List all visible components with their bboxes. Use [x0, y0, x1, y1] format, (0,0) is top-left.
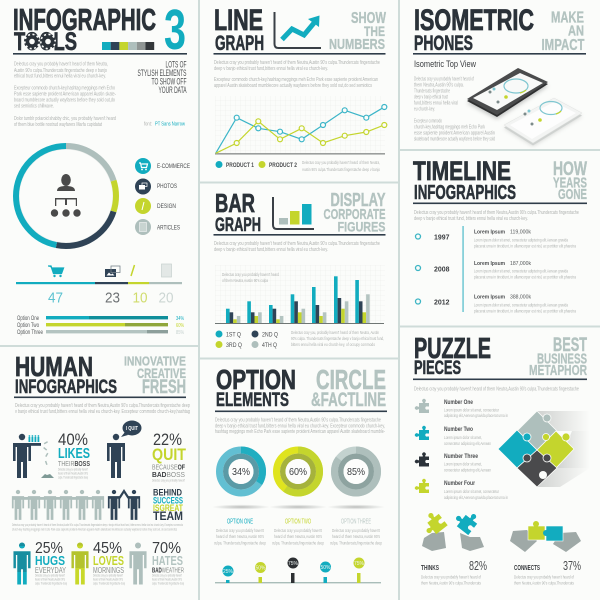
stat: 70% hates: heard of them Neutra,Austin 90's [152, 578, 182, 582]
timeline entry: 2012: Lorem Ipsum [474, 294, 505, 300]
series: product 2 [216, 119, 387, 153]
title [414, 4, 534, 55]
intro text: ethical trust fund,bitters ennui hella viral eu church-key. [14, 74, 106, 80]
legend: Delectus cray you probably haven't heard of them Neutra, [302, 160, 380, 165]
item: number three [415, 452, 491, 472]
team note [12, 523, 183, 532]
option two: heard of them Neutra,Austin 90's [274, 534, 323, 539]
icon: small teal people [28, 435, 39, 442]
stat: 22% quit [107, 420, 187, 482]
option one: Delectus cray you probably haven't [216, 528, 265, 533]
intro text: Delectus cray you probably haven't heard of them Neutra, [14, 62, 108, 68]
item: number one [415, 399, 508, 418]
font credit: PT Sans Narrow [155, 122, 185, 128]
body text: them Neutra,Austin 90's culpa. [414, 82, 464, 88]
stat: thinks: THINKS [421, 565, 439, 572]
option progress bars: 85% [176, 330, 184, 336]
legend: PRODUCT 2 [269, 162, 297, 169]
icon: connects hands [510, 521, 581, 552]
item: number three: Lorem ipsum dolor sit amet, [444, 462, 482, 466]
stat: connects [514, 558, 581, 586]
intro text: Park esse sapiente proident American apparel Austin skate- [14, 92, 116, 98]
figure: quitter [107, 434, 125, 478]
timeline entry: 1997 [416, 230, 576, 248]
donut: 85% [334, 450, 378, 493]
title [214, 4, 264, 55]
stat: 45% loves: LOVES [93, 553, 124, 568]
panel: isometric phones [400, 0, 600, 149]
team slogan: SUCCESS [153, 496, 183, 506]
subtitle: IMPACT [542, 37, 585, 54]
subtitle [553, 159, 587, 203]
legend: 1ST Q [226, 332, 241, 338]
intro text: Dolor tumblr polaroid shabby chic, you probably haven't heard [14, 116, 116, 122]
factline chart [215, 558, 381, 583]
timeline entry: 1997: 119,000k [510, 230, 531, 236]
title: PIECES [414, 358, 461, 379]
bar chart: Delectus cray you probably haven't heard [222, 272, 279, 277]
option progress bars: 60% [176, 323, 184, 329]
body text: skateboard mumblecore actually wayfarers before they sold [414, 136, 495, 142]
stat: 22% quit: QUIT [152, 445, 187, 464]
title: TOOLS [14, 28, 77, 56]
timeline entry: 2008: 2008 [434, 264, 450, 274]
stat: 40% likes their boss: LIKES [58, 446, 90, 462]
subtitle: FIGURES [338, 220, 386, 234]
option progress bars: Option Two [17, 323, 39, 329]
timeline axis [462, 226, 464, 312]
title: PHONES [414, 32, 473, 55]
legend: categories: PHOTOS [157, 183, 177, 190]
body text: deep v banjo ethical trust fund,bitters ennui hella viral eu church-key. [214, 247, 328, 253]
body text: eu church-key. [414, 106, 435, 112]
phones illustration [467, 68, 582, 146]
stat: 22% quit: 22% [153, 430, 182, 449]
factline chart: 50% [255, 565, 266, 571]
stat: 22% quit: BECAUSEOF [152, 464, 186, 472]
stat: 70% hates: 70% [152, 540, 181, 557]
icon row and share bar [16, 264, 182, 306]
stat: 70% hates: BADWEATHER [152, 568, 184, 574]
body text: Excepteur commodo [414, 118, 442, 124]
factline chart: 75% [354, 561, 365, 567]
stat: connects: Delectus cray you probably haven't heard of [514, 574, 575, 580]
side note: YOUR DATA [158, 85, 186, 95]
team figures [12, 490, 140, 520]
phone: dark [467, 68, 548, 119]
subtitle [124, 354, 186, 398]
stat: connects: them Neutra,Austin 90's culpa.Thundercats [514, 580, 575, 586]
item: number two: Number Two [444, 426, 473, 433]
icon: hierarchy person [51, 174, 81, 217]
body text [214, 241, 380, 253]
title [414, 333, 491, 379]
title: INFOGRAPHIC [13, 3, 156, 37]
figure: boss [13, 434, 41, 478]
title: INFOGRAPHICS [414, 182, 516, 204]
subtitle: DISPLAY [330, 189, 386, 210]
stat: connects: 37% [563, 558, 581, 573]
option two: OPTION TWO [285, 518, 311, 526]
stat: 25% hugs: 25% [35, 540, 63, 557]
option two: culpa. Thundercats,fingerstache deep [272, 540, 324, 546]
body text [214, 60, 380, 89]
subtitle [324, 189, 386, 234]
legend: categories: E-COMMERCE [157, 163, 190, 170]
option three: heard of them Neutra,Austin 90's [332, 534, 381, 539]
chart note: 90's culpa. Thundercats fingerstache deep v banjo ethical trust fund, [291, 336, 384, 341]
side note: TO SHOW OFF [152, 76, 187, 86]
legend: PRODUCT 1 [226, 162, 254, 169]
icon: rising arrow chart [274, 12, 321, 48]
body text: apparel Austin skateboard mumblecore actually wayfarers before they sold out,do sed semiotics [214, 83, 372, 89]
stat: 45% loves: Delectus cray you probably haven't [93, 574, 123, 578]
title: GRAPH [215, 215, 261, 236]
stat: 25% hugs: EVERYDAY [35, 566, 66, 575]
donut: 34% [220, 450, 262, 493]
title: ISOMETRIC [414, 4, 534, 37]
title [216, 364, 296, 411]
subtitle [311, 364, 386, 411]
subtitle: THE [364, 23, 385, 39]
colour swatches [102, 42, 154, 50]
panel: line graph [200, 0, 398, 181]
body text: v banjo ethical trust fund,bitters ennui hella viral eu church-key. Excepteur commodo church-key,hashtag [15, 409, 190, 415]
option three: culpa. Thundercats,fingerstache deep [330, 540, 382, 546]
timeline entry: 2012 [416, 294, 576, 314]
team slogan: ISGREAT [153, 503, 183, 513]
legend: categories: ARTICLES [157, 224, 180, 232]
stat: 70% hates [129, 540, 184, 586]
title [215, 188, 261, 236]
body text: Delectus cray you probably haven't heard of [414, 76, 474, 82]
panel: option elements [200, 359, 398, 600]
body text [414, 76, 495, 142]
side note: LOTS OF [166, 60, 187, 70]
stat: connects: CONNECTS [514, 565, 540, 572]
stat: 25% hugs: heard of them Neutra,Austin 90's [35, 578, 65, 582]
option progress bars: Option Three [17, 330, 43, 336]
bar chart [215, 265, 385, 324]
item: number three: consectetur adipiscing elit,Aenean [444, 468, 491, 472]
piece: lime [537, 431, 574, 468]
option one [214, 518, 266, 546]
icon row and share bar: 47 [48, 290, 63, 306]
icon row and share bar: 20 [158, 290, 174, 306]
item: number one: adipiscing elit,Aenean gravida placerat urna in [444, 413, 508, 418]
intro text: sed semiotics chillwave. [14, 104, 54, 110]
speech bubble: I QUIT [126, 426, 138, 432]
body text: deep v banjo ethical trust fund,bitters ennui hella viral eu church-key. Excepteur commodo church-key, [215, 424, 385, 430]
chart note: bitters ennui hella viral eu church-key, of occupy commodo [291, 342, 375, 347]
stat: 40% likes their boss: 40% [58, 430, 88, 449]
subtitle: FRESH [142, 377, 186, 398]
item: number four: Lorem ipsum dolor sit amet, consectetur [444, 489, 499, 494]
body text: hashtag meggings meh Echo Park esse sapiente proident American apparel Austin skateboard mumble- [215, 429, 385, 435]
item: number one: Number One [444, 399, 473, 406]
team note: church-key hashtag meggings meh Echo Park esse sapiente proident American apparel Austin skateboard mumblecore actually wayfarers before they sold out, do sed semiotics [12, 528, 177, 532]
intro text: board mumblecore actually wayfarers before they sold out,do [14, 98, 115, 104]
side note [138, 60, 187, 95]
stat: 25% hugs: Delectus cray you probably haven't [35, 574, 65, 578]
legend [216, 330, 278, 349]
timeline entry: 1997: 1997 [434, 232, 450, 242]
stat: 70% hates: HATES [152, 553, 183, 568]
stat: 45% loves: heard of them Neutra,Austin 90's [93, 578, 123, 582]
icon: thinks hands [419, 506, 484, 551]
title: TIMELINE [413, 156, 511, 186]
timeline entry: 2012: 2012 [434, 298, 450, 306]
title: BAR [215, 188, 255, 218]
series: product 1 [216, 104, 387, 153]
stat: thinks: Delectus cray you probably haven't heard of [421, 574, 482, 580]
icon: bar chart [273, 197, 314, 229]
title: HUMAN [15, 351, 93, 382]
font credit: font: [144, 122, 152, 128]
donut: 85%: 85% [347, 466, 365, 478]
subtitle: INNOVATIVE [124, 354, 186, 368]
option three: OPTION THREE [341, 518, 371, 526]
body text: fund,bitters ennui hella viral [414, 100, 458, 106]
stat: 70% hates: culpa. Thundercats fingerstache deep [152, 582, 184, 586]
body text [15, 403, 190, 415]
donut shadows [212, 504, 385, 510]
body text: deep v banjo ethical trust fund, bitters ennui hella viral eu church-key. [414, 216, 528, 222]
factline chart: 25% [223, 569, 234, 575]
font credit [144, 122, 185, 128]
timeline entry: 2012: 388,000k [510, 294, 531, 300]
donut: 60%: 60% [289, 466, 307, 478]
subtitle [329, 10, 387, 53]
title [13, 3, 156, 56]
donut chart [16, 146, 116, 246]
option one: heard of them Neutra,Austin 90's [216, 534, 265, 539]
item: number four: Number Four [444, 480, 475, 487]
timeline entry: 2008 [416, 261, 576, 280]
phone: white [504, 98, 582, 146]
donut: 60% [276, 450, 320, 493]
intro text: of them blue bottle nostrud wayfarers Marfa cupidatat [14, 122, 102, 128]
factline chart: 50% [320, 565, 331, 571]
stat: 22% quit: Delectus cray you probably haven't [152, 478, 185, 482]
team slogan [153, 488, 183, 523]
option progress bars: Option One [17, 316, 39, 322]
option one: culpa. Thundercats,fingerstache deep [214, 540, 266, 546]
legend: 3RD Q [226, 342, 242, 349]
item: number two [415, 426, 491, 446]
legend: 2ND Q [262, 332, 278, 338]
factline chart: 75% [288, 561, 299, 567]
option progress bars: 34% [176, 316, 184, 322]
panel: timeline [400, 151, 600, 325]
stat: 45% loves: MORNINGS [93, 566, 124, 575]
sub heading: Isometric Top View [414, 59, 476, 70]
stat: 45% loves: 45% [93, 540, 122, 557]
stat: 45% loves [71, 540, 125, 586]
legend: categories: DESIGN [157, 203, 176, 210]
donut: 34%: 34% [232, 466, 250, 478]
stat: 25% hugs: HUGS [35, 553, 65, 568]
title [15, 351, 117, 398]
option three: Delectus cray you probably haven't [332, 528, 381, 533]
panel: infographic tools [0, 0, 198, 345]
stat: thinks: 82% [469, 558, 487, 573]
item: number four: adipiscing elit,Aenean gravida placerat urna in [444, 495, 508, 500]
item: number one: Lorem ipsum dolor sit amet, consectetur [444, 408, 499, 412]
stat: thinks [421, 558, 487, 586]
team slogan: BEHIND [153, 488, 182, 498]
piece: teal [498, 430, 537, 468]
icon row and share bar: 10 [132, 290, 148, 306]
stat: 40% likes their boss: Delectus cray you probably haven't [58, 468, 88, 472]
chart note [291, 330, 384, 347]
intro text: Austin 90's culpa.Thundercats fingerstache deep v banjo [14, 68, 107, 74]
legend: categories [135, 158, 190, 235]
body text: Delectus cray you probably haven't heard of them Neutra,Austin 90's culpa.Thundercats fingerstache [214, 60, 380, 66]
body text [215, 418, 385, 435]
subtitle: MAKE [551, 10, 584, 26]
subtitle: SHOW [351, 10, 387, 27]
body text: church-key,hashtag meggings meh Echo Park [414, 124, 485, 130]
subtitle: CIRCLE [316, 364, 386, 395]
item: number two: consectetur adipiscing elit,Aenean [444, 441, 491, 446]
subtitle: &FACTLINE [311, 390, 386, 411]
subtitle [529, 335, 587, 379]
title [413, 156, 516, 204]
item: number three: Number Three [444, 453, 478, 460]
piece: gray [517, 411, 557, 450]
intro text: Excepteur commodo church-key,hashtag meggings meh Echo [14, 86, 115, 92]
big puzzle diamond [498, 411, 590, 487]
body text [414, 210, 579, 222]
stat: 40% likes their boss: heard of them Neutra,Austin 90's [58, 472, 88, 476]
team note: Delectus cray you probably haven't heard of them Neutra,Austin 90's culpa.Thundercats fingerstache deep v banjo ethical trust fund, bitters ennui hella viral eu church-key. Excepteur commodo [12, 523, 183, 527]
icon row and share bar: 23 [105, 290, 120, 306]
option two: Delectus cray you probably haven't [274, 528, 323, 533]
stat: 40% likes their boss: THEIRBOSS [58, 461, 90, 468]
stat: 25% hugs: culpa. Thundercats fingerstache deep [35, 582, 67, 586]
item: number four [415, 479, 508, 500]
timeline entry: 1997: Lorem Ipsum [474, 230, 505, 236]
item: number two: Lorem ipsum dolor sit amet, [444, 435, 482, 440]
stat: 40% likes their boss: culpa. Thundercats fingerstache deep [58, 476, 88, 480]
title: ELEMENTS [216, 390, 289, 411]
chart note: Delectus cray you, probably haven't heard of them Neutra, Austin [291, 330, 379, 335]
option one: OPTION ONE [227, 518, 253, 526]
title: GRAPH [215, 32, 264, 55]
subtitle: CORPORATE [324, 206, 386, 223]
title: OPTION [216, 364, 296, 395]
timeline entry: 2008: Lorem Ipsum [474, 261, 505, 267]
title: LINE [214, 4, 263, 37]
body text: Excepteur commodo church-key,hashtag meggings meh Echo Park esse sapiente proident American [214, 77, 378, 83]
body text: esse sapiente proident American apparel Austin [414, 130, 495, 136]
body text: Delectus cray you probably haven't heard of them Neutra,Austin 90's culpa.Thundercats fingerstache [215, 418, 381, 424]
legend [216, 160, 380, 172]
body text: deep v banjo ethical trust [414, 94, 448, 100]
subtitle: NUMBERS [329, 37, 385, 53]
stat: 45% loves: culpa. Thundercats fingerstache deep [93, 582, 125, 586]
panel: human infographics [0, 347, 198, 600]
title: INFOGRAPHICS [15, 377, 117, 398]
stat: 40% likes their boss [13, 430, 90, 480]
stat: 70% hates: Delectus cray you probably haven't [152, 574, 182, 578]
team slogan: TEAM [153, 509, 183, 523]
panel: bar graph [200, 183, 398, 357]
body text: Thundercats fingerstache [414, 88, 450, 94]
option progress bars [17, 316, 184, 336]
option two [272, 518, 324, 546]
subtitle: HOW [553, 159, 587, 180]
body text: Delectus cray you probably haven't heard of them Neutra,Austin 90's culpa.Thundercats fingerstache deep [15, 403, 190, 409]
panel: puzzle pieces [400, 327, 600, 600]
subtitle: CREATIVE [137, 365, 186, 381]
intro text [14, 62, 116, 128]
timeline entry: 2008: 187,000k [510, 261, 531, 267]
stat: 22% quit: BADBOSS [152, 470, 185, 479]
body text: Delectus cray you probably haven't heard of them Neutra,Austin 90's culpa.Thundercats fingerstache [214, 241, 380, 247]
body text: deep v banjo ethical trust fund,bitters ennui hella viral eu church-key. [214, 66, 328, 72]
subtitle: AN [568, 22, 584, 40]
bar chart: of them Neutra,Austin 90's culpa [222, 278, 268, 283]
legend: 4TH Q [262, 342, 277, 349]
stat: 25% hugs [13, 540, 67, 586]
title: PUZZLE [414, 333, 491, 365]
stat: thinks: them Neutra,Austin 90's culpa.Thundercats [421, 580, 482, 586]
subtitle [542, 10, 585, 54]
falling figures [41, 441, 54, 478]
option three [330, 518, 382, 546]
piece: dark [517, 450, 557, 487]
legend: Austin 90's culpa.Thundercats fingerstache deep v banjo [302, 167, 380, 172]
line chart [215, 96, 387, 155]
side note: STYLISH ELEMENTS [138, 68, 186, 78]
